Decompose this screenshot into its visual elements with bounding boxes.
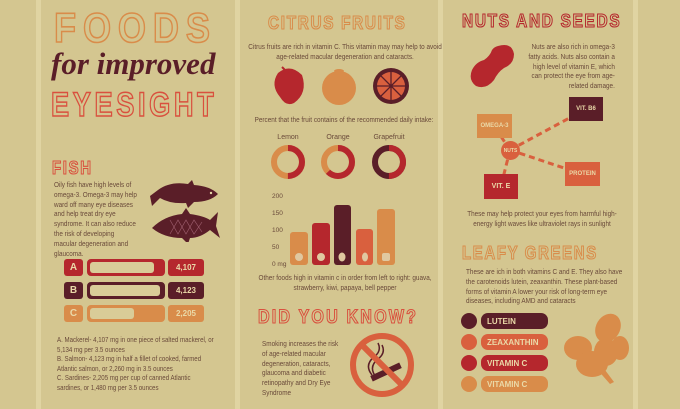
bar C: 2,205 bbox=[176, 309, 196, 318]
bar B bbox=[64, 282, 204, 299]
bar B: 4,123 bbox=[176, 286, 196, 295]
icons: fruits bbox=[274, 66, 409, 105]
bar chart: vitamin c: 50 bbox=[272, 244, 280, 251]
node: omega-3: OMEGA-3 bbox=[480, 123, 508, 129]
node: vit e: VIT. E bbox=[492, 183, 510, 190]
node: vit b6: VIT. B6 bbox=[576, 106, 596, 112]
bar chart: vitamin c: 100 bbox=[272, 227, 283, 234]
text: fish footnotes: B. Salmon- 4,123 mg in half a fillet of cooked, farmed Atlantic salmon, or 2,260 mg in 3.5 ounces bbox=[57, 354, 201, 373]
node: protein: PROTEIN bbox=[569, 171, 596, 177]
item: vitamin c bbox=[461, 355, 548, 371]
bar A: 4,107 bbox=[176, 263, 196, 272]
text: fish footnotes: C. Sardines- 2,205 mg per cup of canned Atlantic sardines, or 1,480 mg per 3.5 ounces bbox=[57, 373, 191, 392]
icon: peanut bbox=[470, 45, 514, 88]
bar A bbox=[64, 259, 204, 276]
item: vitamin c 2 bbox=[461, 376, 548, 392]
bar chart: vitamin c: 200 bbox=[272, 193, 283, 200]
text: other foods: Other foods high in vitamin c in order from left to right: guava, strawberry, kiwi, papaya, bell pepper bbox=[258, 273, 432, 292]
node: protein bbox=[565, 162, 600, 186]
node: nuts bbox=[501, 141, 520, 160]
icon: no smoking bbox=[350, 333, 414, 397]
text: citrus: Citrus fruits are rich in vitamin C. This vitamin may may help to avoid age-related macular degeneration and cataracts. bbox=[248, 42, 442, 61]
list: nutrients bbox=[461, 313, 548, 392]
donut charts: Orange bbox=[326, 134, 350, 141]
text: nuts caption: These may help protect your eyes from harmful high-energy light waves like ultraviolet rays in sunlight bbox=[467, 209, 617, 228]
text: leafy greens: These are ich in both vitamins C and E. They also have the carotenoids lutein, zeaxanthin. These plant-based forms of vitamin A lower your risk of long-term eye diseases, including AMD and cataracts bbox=[466, 267, 622, 305]
bar chart: vitamin c: 150 bbox=[272, 210, 283, 217]
item: zeaxanthin: ZEAXANTHIN bbox=[487, 338, 539, 346]
bar chart: fish bbox=[64, 259, 204, 322]
item: vitamin c 2: VITAMIN C bbox=[487, 380, 527, 388]
node: nuts: NUTS bbox=[504, 148, 517, 154]
bar A: A bbox=[70, 262, 77, 273]
bar chart: vitamin c bbox=[272, 193, 395, 268]
text: nuts: Nuts are also rich in omega-3 fatty acids. Nuts also contain a high level of vitamin E, which can protect the eye from age-related damage. bbox=[528, 42, 615, 90]
icon: leaf bbox=[564, 314, 629, 384]
node: vit e bbox=[484, 174, 518, 199]
donut charts: Grapefruit bbox=[373, 134, 405, 141]
diagram: nuts bbox=[477, 97, 603, 199]
text: smoking: Smoking increases the risk of age-related macular degeneration, cataracts, glaucoma and diabetic retinopathy and Dry Eye Syndrome bbox=[262, 339, 338, 397]
bar B: B bbox=[70, 285, 77, 296]
donut charts bbox=[271, 134, 406, 179]
bar chart: vitamin c: 0 mg bbox=[272, 261, 287, 268]
title: for improved: for improved bbox=[51, 46, 215, 81]
item: vitamin c: VITAMIN C bbox=[487, 358, 527, 368]
text: fish footnotes bbox=[57, 335, 214, 392]
item: lutein: LUTEIN bbox=[487, 316, 516, 326]
node: omega-3 bbox=[477, 114, 512, 138]
node: vit b6 bbox=[569, 97, 603, 121]
text: fish footnotes: A. Mackerel- 4,107 mg in one piece of salted mackerel, or 5,134 mg per 3.5 ounces bbox=[57, 335, 214, 354]
item: lutein bbox=[461, 313, 548, 329]
text: fish: Oily fish have high levels of omega-3. Omega-3 may help ward off many eye diseases and help treat dry eye syndrome. It can also reduce the risk of developing macular degeneration and glaucoma. bbox=[54, 180, 137, 258]
text: percent: Percent that the fruit contains of the recommended daily intake: bbox=[255, 115, 433, 124]
icon: fish bbox=[150, 180, 220, 242]
bar C: C bbox=[70, 308, 77, 319]
item: zeaxanthin bbox=[461, 334, 548, 350]
donut charts: Lemon bbox=[277, 134, 299, 141]
bar C bbox=[64, 305, 204, 322]
